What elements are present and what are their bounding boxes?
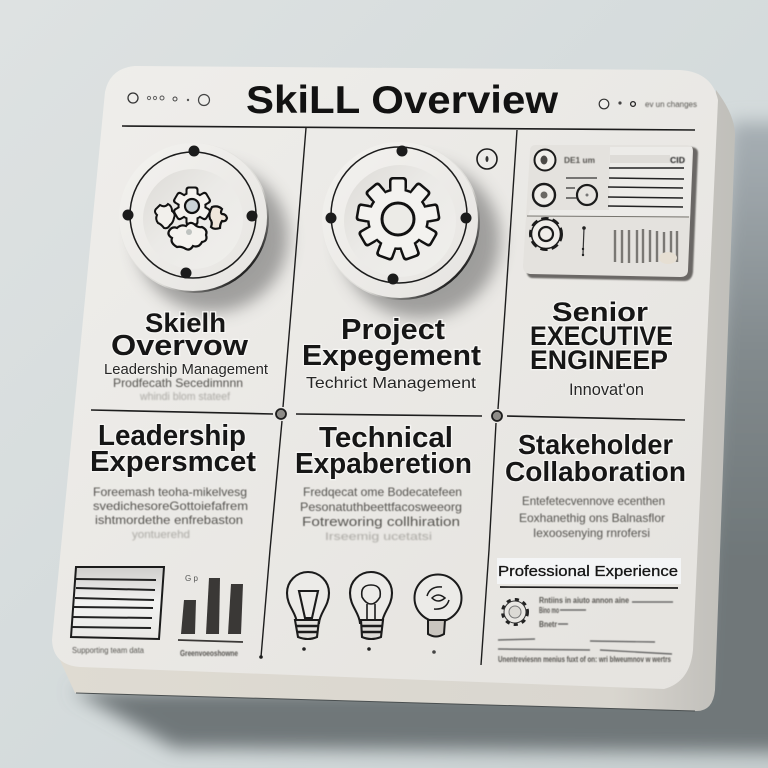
column 1 top text: Leadership Management <box>104 361 269 378</box>
board base edge <box>76 693 695 711</box>
detail text: Bino mo <box>539 606 559 615</box>
gear: left <box>155 204 175 228</box>
title: SkiLL Overview <box>246 79 559 122</box>
column 2 lower text <box>295 422 472 543</box>
column 2 top text: Techrict Management <box>306 375 477 392</box>
panel slider <box>583 228 584 254</box>
column 1 lower text: ishtmordethe enfrebaston <box>95 513 243 527</box>
icon: dial with cluster of gears <box>119 143 288 312</box>
gear <box>355 177 441 262</box>
column 3 top text <box>530 297 673 399</box>
icon: small target <box>477 149 497 169</box>
column 3 lower text: Eoxhanethig ons Balnasflor <box>519 511 665 525</box>
icon: document <box>71 567 164 639</box>
column 3 lower text: Iexoosenying rnrofersi <box>533 526 650 540</box>
column 2 lower text: Technical <box>319 422 453 454</box>
panel slider dots <box>582 226 586 256</box>
column 2 lower text: Expaberetion <box>295 448 472 480</box>
column 2 lower text: Irseemig ucetatsi <box>325 531 432 543</box>
small gear <box>503 600 527 624</box>
board <box>52 66 735 711</box>
heading: Professional Experience <box>498 563 678 580</box>
board shadow <box>72 122 768 752</box>
column 3 lower text: Collaboration <box>505 456 686 487</box>
panel gear <box>531 219 561 249</box>
bar chart: G p <box>185 574 198 583</box>
detail text <box>539 596 629 629</box>
header dots right: ev un changes <box>645 100 697 109</box>
column 3 top text: EXECUTIVE <box>530 321 673 351</box>
column 2 lower text: Fredqecat ome Bodecatefeen <box>303 485 462 499</box>
column 1 lower text: svedichesoreGottoiefafrem <box>93 499 248 513</box>
column 1 lower text: Foreemash teoha-mikelvesg <box>93 485 247 499</box>
column 3 lower text: Stakeholder <box>518 429 673 460</box>
detail text: Bnetr <box>539 620 557 629</box>
icon: light bulb 2 <box>350 572 392 651</box>
column 3 top text: ENGINEEP <box>530 345 668 375</box>
bar chart <box>178 574 243 658</box>
icon: light bulb 3 <box>414 574 462 654</box>
detail text: Rntiins in aiuto annon aine <box>539 596 629 605</box>
label: document: Supporting team data <box>72 646 145 655</box>
column 1 top text <box>104 308 269 403</box>
column 1 top text: Overvow <box>111 330 248 362</box>
panel: dashboard <box>523 145 698 281</box>
column 1 lower text: Leadership <box>98 420 246 452</box>
column 3 lower text <box>505 429 686 540</box>
panel lines <box>608 168 684 207</box>
board side <box>53 90 735 711</box>
column 2 top text <box>302 314 481 392</box>
header dots right <box>599 99 697 109</box>
gear: right <box>209 206 227 229</box>
column 2 lower text: Pesonatuthbeettfacosweeorg <box>300 500 462 514</box>
column 1 lower text <box>90 420 256 541</box>
node: right <box>492 411 502 421</box>
panel bars <box>615 229 677 264</box>
column 1 top text: whindi blom stateef <box>139 391 231 403</box>
column 3 top text: Senior <box>552 297 649 327</box>
column 1 top text: Skielh <box>145 308 226 338</box>
column 3 top text: Innovat'on <box>569 380 644 399</box>
panel: professional experience: Unentreviesnn menius fuxt of on: wri blweumnov w wertrs <box>498 655 671 664</box>
column 2 top text: Expegement <box>302 340 481 372</box>
column 1 top text: Prodfecath Secedimnnn <box>113 376 243 390</box>
panel header text: CID <box>670 156 685 165</box>
column 1 lower text: yontuerehd <box>132 529 190 541</box>
node: left <box>276 409 286 419</box>
header dots left <box>128 93 210 106</box>
icon: light bulb 1 <box>287 572 329 651</box>
panel header text <box>564 155 685 165</box>
panel: professional experience <box>497 558 681 664</box>
column 2 top text: Project <box>341 314 445 346</box>
panel knobs <box>533 150 597 206</box>
icon: dial with gear <box>322 142 500 318</box>
column 1 lower text: Expersmcet <box>90 446 256 478</box>
column 3 lower text: Entefetecvennove ecenthen <box>522 494 665 508</box>
grid lines <box>91 126 695 665</box>
column 2 lower text: Fotreworing collhiration <box>302 514 460 529</box>
gear: bottom <box>168 223 206 250</box>
gear: top <box>172 186 212 226</box>
panel header text: DE1 um <box>564 156 595 165</box>
bar chart: Greenvoeoshowne <box>180 649 238 658</box>
board face <box>52 66 718 689</box>
